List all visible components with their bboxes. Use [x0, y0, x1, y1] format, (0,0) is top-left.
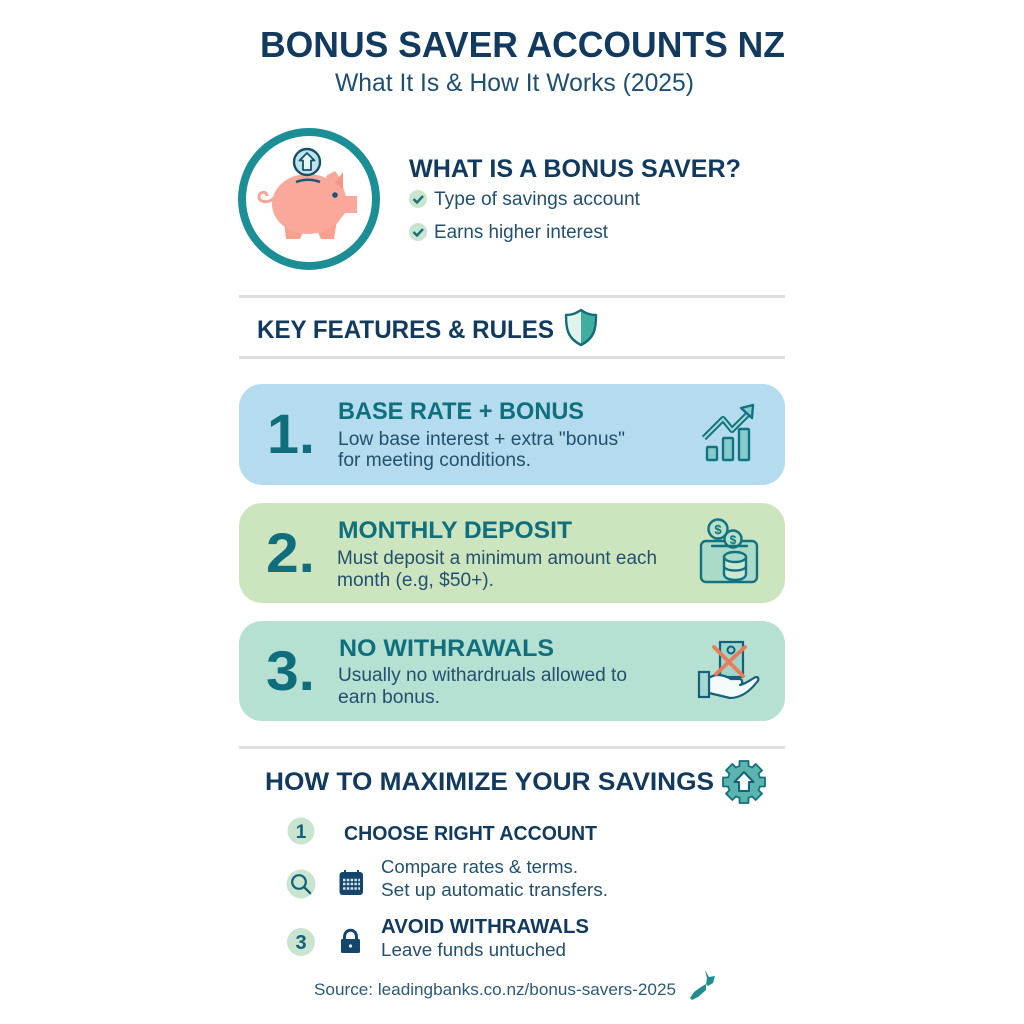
subtitle: What It Is & How It Works (2025) — [335, 69, 694, 97]
step 3: 3 — [295, 932, 307, 954]
title: BONUS SAVER ACCOUNTS NZ — [260, 24, 785, 65]
icon: shield — [566, 310, 596, 345]
icon: coin with up arrow — [294, 149, 320, 175]
text: leave funds: Leave funds untuched — [381, 940, 566, 960]
icon: growth chart — [704, 405, 753, 460]
number 1: 1. — [267, 402, 315, 465]
icon: piggy bank in ring — [242, 132, 376, 266]
icon: coin slot — [296, 180, 320, 182]
heading: no withdrawals: NO WITHRAWALS — [339, 635, 554, 662]
heading: how to maximize: HOW TO MAXIMIZE YOUR SAVINGS — [265, 768, 714, 796]
panel: no withdrawals — [239, 621, 785, 721]
icon: coins and wallet — [701, 520, 757, 582]
badge 1 — [288, 818, 314, 844]
icon: calendar — [340, 870, 363, 895]
text: description — [337, 548, 657, 591]
icon: pig body — [272, 171, 357, 239]
text: description: Low base interest + extra "bonus" — [338, 429, 625, 450]
heading: what is a bonus saver: WHAT IS A BONUS SAVER? — [409, 155, 741, 183]
icon: coins and wallet: $ — [714, 522, 722, 537]
text: choose right account: CHOOSE RIGHT ACCOUNT — [344, 822, 597, 845]
text: description: Must deposit a minimum amount each — [337, 548, 657, 569]
icon: check — [409, 190, 427, 208]
step 1 — [288, 818, 597, 845]
icon: check — [409, 223, 427, 241]
text: compare rates: Compare rates & terms. — [381, 857, 578, 877]
number 3: 3. — [266, 639, 315, 702]
icon: magnifier — [286, 870, 316, 898]
heading: monthly deposit: MONTHLY DEPOSIT — [338, 517, 572, 544]
text: description: Usually no withardruals allowed to — [338, 665, 627, 686]
heading: key features and rules: KEY FEATURES & RULES — [257, 316, 554, 344]
text: description: month (e.g, $50+). — [337, 570, 494, 591]
step 2 — [286, 857, 608, 900]
list: what is a bonus saver — [409, 189, 641, 243]
icon: pig eye — [332, 192, 338, 198]
text: description: for meeting conditions. — [338, 450, 531, 471]
text: higher interest: Earns higher interest — [434, 222, 609, 243]
icon: gear with up arrow — [723, 761, 765, 803]
panel: monthly deposit — [239, 503, 785, 603]
step 3 — [287, 916, 589, 960]
badge 3 — [287, 928, 315, 956]
text: savings account: Type of savings account — [434, 189, 641, 210]
step 1: 1 — [296, 822, 307, 843]
icon: new zealand map — [690, 970, 715, 1000]
text: compare rates — [381, 857, 608, 900]
text: description — [338, 429, 625, 471]
icon: hand with crossed-out cash — [699, 642, 758, 698]
text: compare rates: Set up automatic transfers. — [381, 880, 608, 900]
heading: base rate + bonus: BASE RATE + BONUS — [338, 398, 584, 425]
icon: coins and wallet: $ — [730, 533, 737, 547]
icon: lock — [341, 930, 360, 953]
number 2: 2. — [266, 521, 315, 584]
text: description — [338, 665, 627, 708]
text: description: earn bonus. — [338, 687, 440, 708]
source: Source: leadingbanks.co.nz/bonus-savers-2025 — [314, 980, 676, 999]
icon: pig tail — [259, 192, 274, 202]
panel: base rate + bonus — [239, 384, 785, 485]
text: avoid withrawals: AVOID WITHRAWALS — [381, 916, 589, 938]
